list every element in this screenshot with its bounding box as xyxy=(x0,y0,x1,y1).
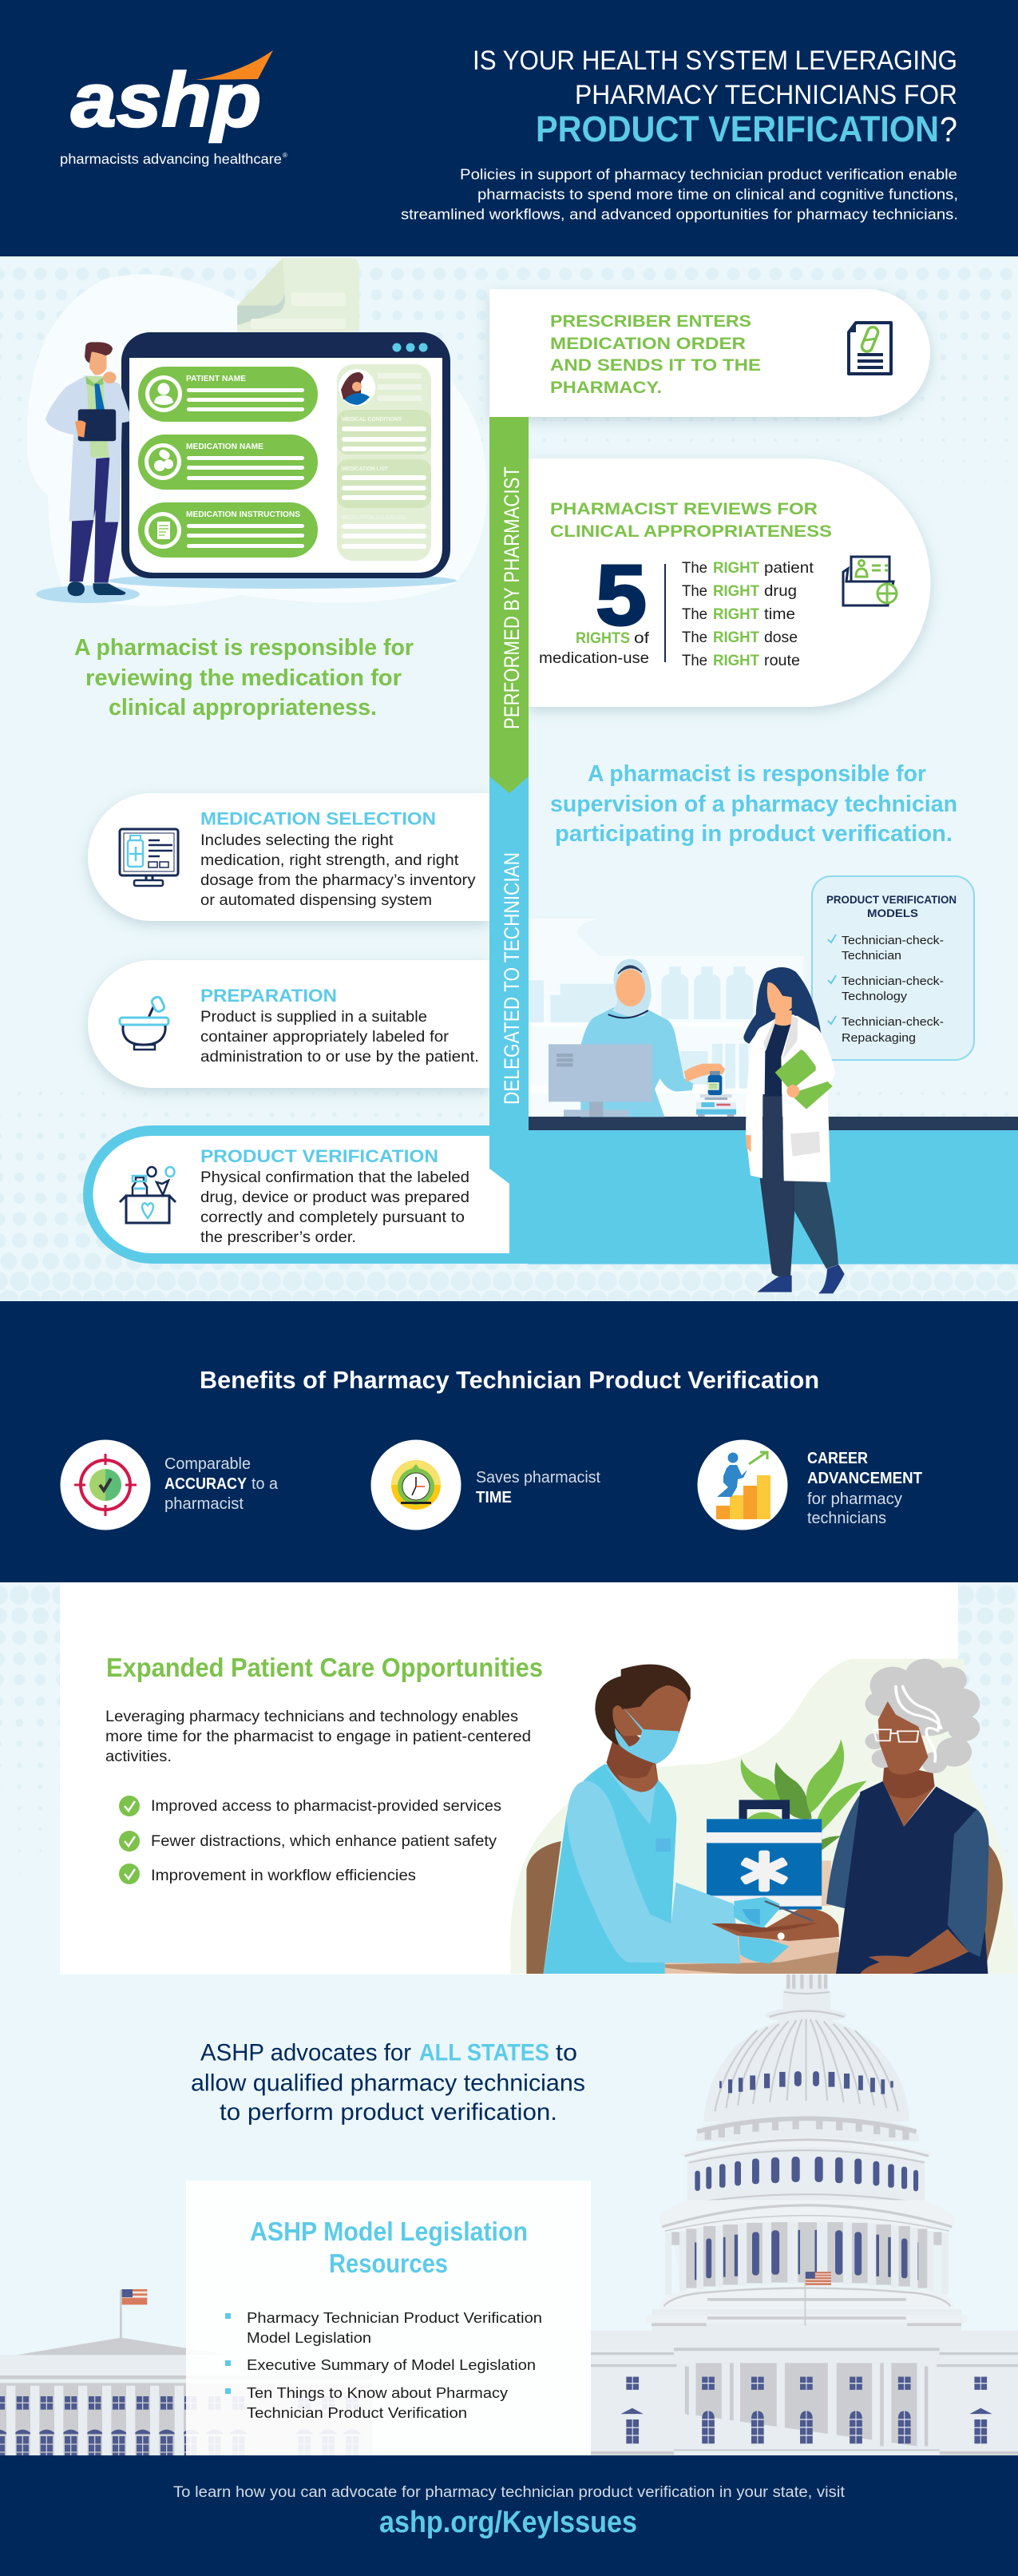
capitol flag xyxy=(805,2272,831,2325)
medication instructions row xyxy=(138,502,318,558)
intro paragraph xyxy=(401,166,958,222)
icon: clock saving time xyxy=(370,1439,461,1530)
plant xyxy=(741,1739,867,1906)
legislation links: Executive Summary of Model Legislation xyxy=(247,2357,536,2373)
green blob backdrop xyxy=(510,1659,1018,1974)
ashp logo xyxy=(60,50,287,167)
career text: technicians xyxy=(807,1510,886,1527)
legislation links: Ten Things to Know about Pharmacy xyxy=(247,2385,508,2401)
five rights list: RIGHT xyxy=(713,605,759,623)
patient name row: PATIENT NAME xyxy=(186,375,246,383)
icon: accuracy target xyxy=(61,1439,150,1530)
patient name row xyxy=(138,367,318,422)
caption: pharmacist responsible for supervision: participating in product verification. xyxy=(555,821,953,847)
advocacy statement: to perform product verification. xyxy=(220,2099,557,2125)
patient sidebar xyxy=(337,364,431,561)
panel: expanded patient care xyxy=(60,1582,958,1975)
accuracy text xyxy=(164,1455,279,1513)
models list: Technician-check- xyxy=(842,934,944,947)
benefits heading: Benefits of Pharmacy Technician Product Verification xyxy=(200,1366,819,1394)
doctor figure xyxy=(46,342,129,596)
five rights list: patient xyxy=(764,559,814,577)
panel: product verification models xyxy=(812,876,974,1060)
background dot pattern xyxy=(0,274,1018,1872)
models list: Repackaging xyxy=(842,1031,916,1045)
medication selection text: or automated dispensing system xyxy=(200,892,432,909)
preparation text: container appropriately labeled for xyxy=(200,1029,450,1046)
five rights list: The xyxy=(682,559,707,577)
legislation heading xyxy=(250,2217,528,2278)
table xyxy=(665,1919,839,1974)
ribbon: performed by pharmacist xyxy=(489,417,529,793)
illustration: pharmacist with folder xyxy=(743,967,845,1293)
intro paragraph: streamlined workflows, and advanced opportunities for pharmacy technicians. xyxy=(401,206,958,222)
five rights number: RIGHTS xyxy=(576,629,630,647)
advocacy statement: allow qualified pharmacy technicians xyxy=(191,2070,585,2096)
ribbon: delegated to technician: DELEGATED TO TECHNICIAN xyxy=(500,852,524,1105)
models list xyxy=(828,934,944,1045)
prescriber heading: PRESCRIBER ENTERS xyxy=(550,312,751,331)
legislation heading: Resources xyxy=(329,2249,448,2278)
models heading xyxy=(826,893,957,919)
intro paragraph: Policies in support of pharmacy technician product verification enable xyxy=(460,166,957,182)
footer call to action: To learn how you can advocate for pharmacy technician product verification in your state, visit xyxy=(173,2484,846,2501)
illustration: pharmacy counter scene xyxy=(529,919,1018,1264)
patient sidebar: MEDICATION LIST xyxy=(342,466,389,472)
record screen xyxy=(121,332,450,578)
medication instructions row: MEDICATION INSTRUCTIONS xyxy=(186,510,300,519)
accuracy text: to a xyxy=(252,1475,279,1493)
pharmacy shelves backdrop xyxy=(529,919,804,1117)
medication name row xyxy=(138,435,318,490)
intro paragraph: pharmacists to spend more time on clinical and cognitive functions, xyxy=(477,187,958,203)
footer xyxy=(0,2455,1018,2576)
light blob backdrop xyxy=(27,274,487,606)
capitol wings and portico xyxy=(591,2331,1018,2456)
preparation text: administration to or use by the patient. xyxy=(200,1049,479,1066)
lantern and dome xyxy=(704,1975,909,2122)
icon: career advancement xyxy=(698,1439,787,1530)
footer link: ashp.org/KeyIssues xyxy=(379,2506,637,2539)
product verification text: correctly and completely pursuant to xyxy=(200,1209,465,1226)
balustrade and drum xyxy=(681,2115,933,2203)
product verification text: drug, device or product was prepared xyxy=(200,1189,469,1206)
five rights list xyxy=(682,559,814,669)
technician in hijab xyxy=(580,959,725,1117)
models heading: PRODUCT VERIFICATION xyxy=(826,893,957,906)
models list: Technician-check- xyxy=(842,1015,944,1029)
expanded care paragraph: Leveraging pharmacy technicians and technology enables xyxy=(105,1709,518,1725)
panel: prescriber enters order xyxy=(489,289,930,417)
panel: product verification xyxy=(83,1125,529,1264)
icon: package with medicine xyxy=(120,1167,176,1223)
ribbon: delegated to technician xyxy=(489,767,529,1184)
expanded care checklist: Fewer distractions, which enhance patient safety xyxy=(151,1833,497,1850)
five rights list: The xyxy=(682,605,707,623)
icon: prescription document xyxy=(849,323,891,374)
illustration: left government building xyxy=(0,2289,373,2460)
five rights number: medication-use xyxy=(539,649,649,667)
preparation text: Product is supplied in a suitable xyxy=(200,1009,427,1026)
time text: TIME xyxy=(476,1489,512,1506)
accuracy text: Comparable xyxy=(164,1455,251,1473)
patient sidebar: MEDICATION ALLERGIES xyxy=(342,515,406,521)
caption: pharmacist responsible for reviewing xyxy=(74,635,414,720)
pharmacist reviews heading: CLINICAL APPROPRIATENESS xyxy=(550,522,832,541)
ashp logo: ashp xyxy=(71,58,261,143)
panel: pharmacist reviews xyxy=(529,458,930,707)
legislation links: Pharmacy Technician Product Verification xyxy=(247,2310,542,2326)
caption: pharmacist responsible for reviewing: reviewing the medication for xyxy=(85,665,402,691)
five rights list: time xyxy=(764,605,795,623)
panel: medication selection xyxy=(88,793,489,921)
prescriber heading: PHARMACY. xyxy=(550,378,662,397)
nurse xyxy=(543,1665,741,1974)
advocacy statement: ASHP advocates for xyxy=(200,2040,411,2066)
five rights list: dose xyxy=(764,629,798,646)
five rights number: 5 xyxy=(596,546,647,643)
caption: pharmacist responsible for supervision: A pharmacist is responsible for xyxy=(588,761,926,787)
advocacy statement xyxy=(191,2040,585,2125)
panel: benefits xyxy=(0,1301,1018,1582)
patient hair and glasses xyxy=(865,1659,980,1775)
five rights list: The xyxy=(682,582,707,600)
pharmacist reviews heading: PHARMACIST REVIEWS FOR xyxy=(550,499,818,518)
patient sidebar: MEDICAL CONDITIONS xyxy=(342,415,402,423)
floor shadows xyxy=(109,573,457,589)
expanded care paragraph: more time for the pharmacist to engage in patient-centered xyxy=(105,1729,531,1745)
legislation heading: ASHP Model Legislation xyxy=(250,2217,528,2246)
icon: monitor with medicine xyxy=(120,829,178,886)
expanded care paragraph xyxy=(105,1709,531,1765)
preparation text: PREPARATION xyxy=(200,986,337,1006)
main title: ? xyxy=(940,110,957,149)
product verification text xyxy=(200,1146,469,1246)
product verification text: Physical confirmation that the labeled xyxy=(200,1169,469,1186)
panel: preparation xyxy=(88,960,489,1088)
career text: ADVANCEMENT xyxy=(807,1470,922,1487)
five rights list: RIGHT xyxy=(713,582,759,600)
main title: PHARMACY TECHNICIANS FOR xyxy=(575,80,957,110)
panel: model legislation resources xyxy=(186,2181,591,2455)
advocacy statement: ALL STATES xyxy=(419,2040,549,2066)
prescriber heading xyxy=(550,312,761,397)
five rights list: route xyxy=(764,652,800,669)
legislation links: Model Legislation xyxy=(247,2330,371,2346)
expanded care checklist: Improvement in workflow efficiencies xyxy=(151,1868,416,1884)
five rights list: The xyxy=(682,629,707,646)
colonnade drum xyxy=(659,2200,955,2311)
caption: pharmacist responsible for supervision xyxy=(550,761,957,847)
product verification text: PRODUCT VERIFICATION xyxy=(200,1146,438,1166)
main title xyxy=(473,46,957,149)
expanded care checklist: Improved access to pharmacist-provided services xyxy=(151,1798,501,1815)
five rights list: drug xyxy=(764,582,797,600)
five rights list: The xyxy=(682,652,707,669)
expanded care paragraph: activities. xyxy=(105,1748,172,1765)
patient xyxy=(711,1763,989,1974)
computer monitor xyxy=(549,1044,652,1117)
career text xyxy=(807,1450,922,1527)
medication name row: MEDICATION NAME xyxy=(186,443,263,451)
ashp logo: pharmacists advancing healthcare xyxy=(60,151,282,167)
expanded care checklist xyxy=(119,1796,501,1884)
preparation text xyxy=(200,986,479,1066)
icon: patient folder xyxy=(843,557,897,605)
medication selection text: dosage from the pharmacy’s inventory xyxy=(200,872,476,889)
expanded care heading: Expanded Patient Care Opportunities xyxy=(106,1653,543,1682)
five rights number: of xyxy=(634,629,650,647)
illustration: nurse and patient xyxy=(510,1659,1018,1974)
illustration: doctor with patient record screen xyxy=(27,258,487,606)
time text xyxy=(476,1469,600,1506)
prescriber heading: AND SENDS IT TO THE xyxy=(550,355,761,375)
ribbon: performed by pharmacist: PERFORMED BY PHARMACIST xyxy=(500,466,524,729)
advocacy statement: to xyxy=(556,2040,577,2066)
models list: Technician-check- xyxy=(842,974,944,988)
paper behind screen xyxy=(237,258,359,334)
main title: PRODUCT VERIFICATION xyxy=(536,109,939,149)
ashp logo: ® xyxy=(283,152,287,159)
medication selection text: medication, right strength, and right xyxy=(200,852,459,869)
five rights list: RIGHT xyxy=(713,629,759,646)
header band xyxy=(0,0,1018,256)
models list: Technician xyxy=(842,949,901,963)
legislation links: Technician Product Verification xyxy=(247,2405,467,2421)
capitol stepped base xyxy=(646,2300,967,2332)
medical bag xyxy=(707,1800,822,1910)
chairs xyxy=(526,1841,561,1974)
models heading: MODELS xyxy=(867,907,918,919)
icon: mortar and pestle xyxy=(120,996,168,1050)
illustration: capitol building xyxy=(591,1975,1018,2456)
career text: for pharmacy xyxy=(807,1490,902,1508)
caption: pharmacist responsible for supervision: supervision of a pharmacy technician xyxy=(550,792,957,817)
legislation links xyxy=(225,2310,542,2421)
gloves and syringe xyxy=(734,1897,814,1963)
product verification text: the prescriber’s order. xyxy=(200,1229,356,1246)
caption: pharmacist responsible for reviewing: A pharmacist is responsible for xyxy=(74,635,414,661)
career text: CAREER xyxy=(807,1450,869,1467)
five rights list: RIGHT xyxy=(713,652,759,669)
time text: Saves pharmacist xyxy=(476,1469,600,1486)
counter xyxy=(529,1117,1018,1264)
medication selection text xyxy=(200,808,476,909)
five rights list: RIGHT xyxy=(713,559,759,577)
main title: IS YOUR HEALTH SYSTEM LEVERAGING xyxy=(473,46,957,76)
five rights number xyxy=(539,546,650,667)
models list: Technology xyxy=(842,990,908,1003)
medicine bottle on scale xyxy=(696,1071,736,1117)
accuracy text: ACCURACY xyxy=(164,1475,248,1493)
caption: pharmacist responsible for reviewing: clinical appropriateness. xyxy=(109,695,377,720)
medication selection text: Includes selecting the right xyxy=(200,832,394,849)
prescriber heading: MEDICATION ORDER xyxy=(550,334,747,353)
pharmacist reviews heading xyxy=(550,499,832,541)
medication selection text: MEDICATION SELECTION xyxy=(200,808,436,829)
accuracy text: pharmacist xyxy=(164,1495,244,1513)
